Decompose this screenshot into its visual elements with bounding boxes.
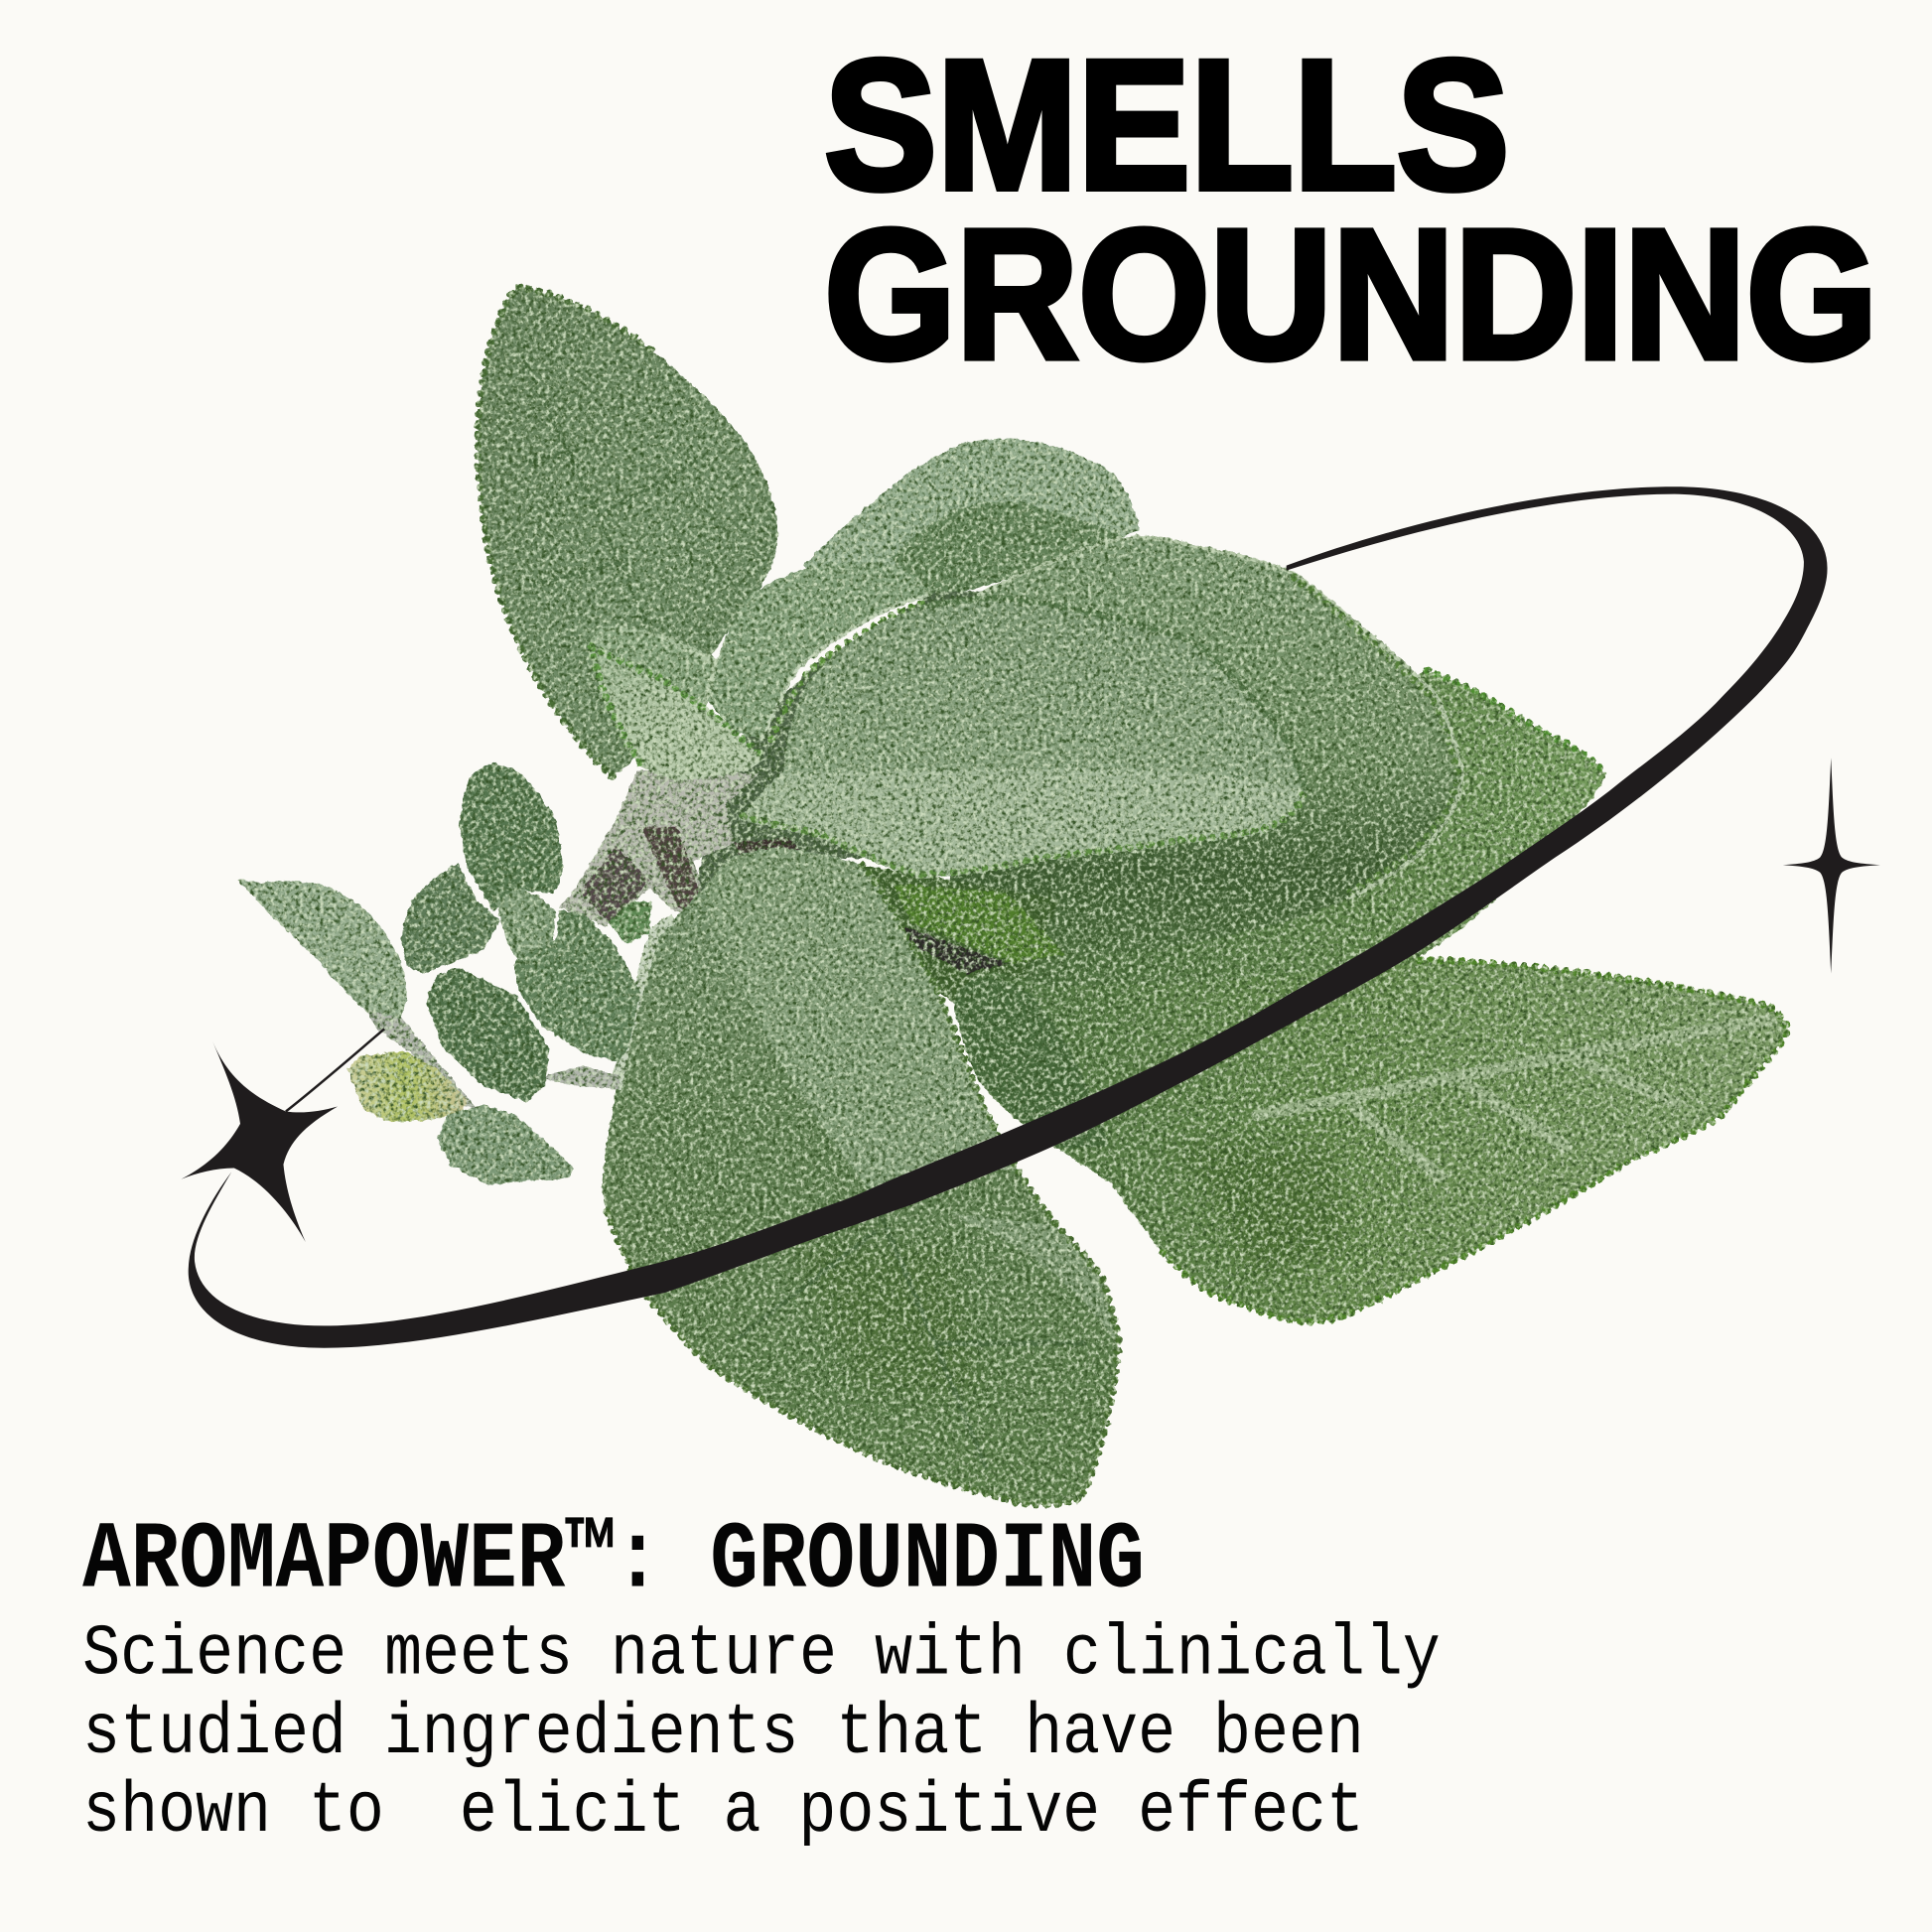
lighter right half of leaf (705, 848, 1017, 1189)
dark stem behind leaves (904, 926, 1008, 973)
small left leaves cluster (236, 762, 652, 1185)
small leaf: right (515, 910, 640, 1062)
back right leaf (986, 670, 1606, 1109)
dark gap filler behind centre (690, 592, 1011, 899)
top large leaf (478, 287, 778, 776)
icon: sparkle star right (1783, 758, 1880, 973)
dark centre of lower leaf (788, 1244, 986, 1392)
dark central patch of lower leaf (1176, 1140, 1349, 1282)
lower right large leaf (954, 960, 1787, 1321)
body text (82, 1613, 1441, 1853)
tiny leaf near stem (609, 900, 652, 944)
bright green leaf underside (894, 884, 1064, 964)
small leaf: bottom (438, 1105, 574, 1185)
heading: AromaPower: AROMAPOWER™: GROUNDING (82, 1506, 1145, 1614)
central front leaf lower lip (738, 768, 1307, 879)
front bottom large leaf (603, 848, 1119, 1505)
large rounded middle leaf (949, 537, 1462, 954)
small curled leaf (588, 625, 762, 781)
orbit ring with tapered stroke (189, 486, 1828, 1348)
body text: studied ingredients that have been (82, 1693, 1364, 1774)
body text: Science meets nature with clinically (82, 1613, 1441, 1695)
icon: four-point star left (181, 1041, 338, 1242)
curled leaf behind bud (706, 563, 929, 743)
body text: shown to elicit a positive effect (82, 1771, 1364, 1853)
shaded fold of lower leaf (954, 978, 1109, 1149)
title: SMELLS (824, 22, 1509, 228)
stems (559, 770, 801, 926)
back upper inner fold (893, 501, 1124, 599)
small leaf: middle dark (426, 968, 550, 1102)
back upper leaf (803, 439, 1140, 604)
small leaf: upper back (400, 863, 500, 973)
central front leaf upper surface (782, 598, 1307, 791)
small leaf: left pale (236, 879, 407, 1018)
lighter lower tip edge (949, 1213, 1116, 1343)
small leaf: top oval (460, 762, 563, 910)
small stem (363, 1006, 619, 1109)
small leaf: curl (496, 888, 556, 960)
under-leaf dark patch (863, 865, 1059, 1004)
flower bud (347, 1051, 467, 1123)
title (824, 22, 1877, 398)
sage sprig photo illustration (236, 287, 1787, 1505)
